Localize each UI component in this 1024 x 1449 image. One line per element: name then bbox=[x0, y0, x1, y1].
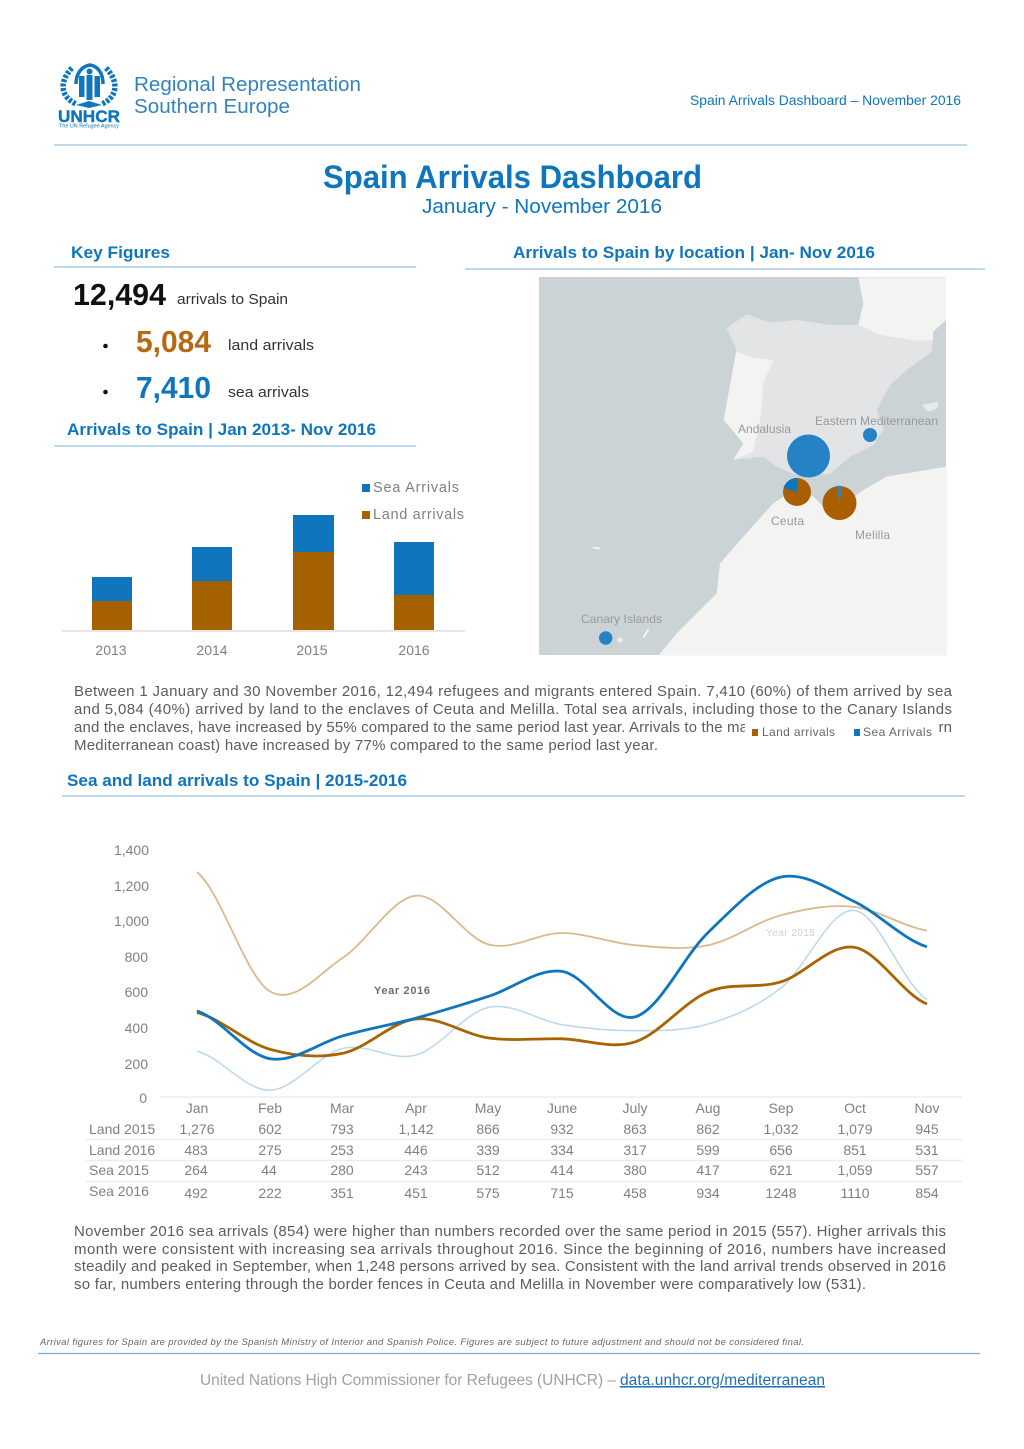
text block: summary: and 5,084 (40%) arrived by land to the enclaves of Ceuta and Melilla. Total sea arrivals, including those to the Canary Islands bbox=[74, 701, 952, 718]
table row: sea 2016: 854 bbox=[915, 1185, 939, 1201]
map marker: Andalusia: Andalusia bbox=[738, 422, 791, 436]
footer: data.unhcr.org/mediterranean bbox=[620, 1372, 825, 1389]
table row: land 2016: 531 bbox=[915, 1142, 939, 1158]
table row: land 2015: 863 bbox=[623, 1121, 647, 1137]
bar chart legend: Sea Arrivals bbox=[373, 480, 459, 496]
table row: land 2015: 1,142 bbox=[398, 1121, 434, 1137]
table row: sea 2015: 557 bbox=[915, 1162, 939, 1178]
bar chart: 2016 bbox=[398, 642, 430, 658]
table row: land 2015: 602 bbox=[258, 1121, 282, 1137]
table row: land 2016: 253 bbox=[330, 1142, 354, 1158]
table row: sea 2015: 280 bbox=[330, 1162, 354, 1178]
footnote: Arrival figures for Spain are provided by the Spanish Ministry of Interior and Spanish Police. Figures are subject to future adjustment and should not be considered final. bbox=[39, 1337, 804, 1348]
table row: land 2016: 483 bbox=[184, 1142, 208, 1158]
footer: United Nations High Commissioner for Refugees (UNHCR) – bbox=[200, 1372, 616, 1389]
table header: months: Apr bbox=[405, 1100, 427, 1116]
text block: summary: Mediterranean coast) have increased by 77% compared to the same period last year. bbox=[74, 737, 658, 754]
table header: months: Jan bbox=[186, 1100, 208, 1116]
bar chart bbox=[62, 515, 465, 658]
map marker: Eastern Mediterranean: Eastern Mediterranean bbox=[815, 414, 938, 428]
header: document label: Spain Arrivals Dashboard – November 2016 bbox=[690, 93, 961, 108]
y axis labels bbox=[114, 842, 149, 1106]
text block: november commentary: November 2016 sea arrivals (854) were higher than numbers recorded over the same period in 2015 (557). Higher arrivals this bbox=[74, 1223, 946, 1240]
line: land 2016 bbox=[197, 947, 927, 1056]
total arrivals bbox=[73, 277, 288, 312]
table header: months: Sep bbox=[769, 1100, 794, 1116]
panel: key figures bbox=[54, 243, 416, 405]
text block: november commentary: steadily and peaked in September, when 1,248 persons arrived by sea. Consistent with the land arrival trends observed in 2016 bbox=[74, 1258, 946, 1275]
table row: land 2016: 275 bbox=[258, 1142, 282, 1158]
header: office name bbox=[134, 74, 361, 118]
table row: land 2015: 1,079 bbox=[837, 1121, 873, 1137]
map marker: Eastern Mediterranean bbox=[815, 414, 938, 442]
table header: months: Nov bbox=[915, 1100, 939, 1116]
table row: sea 2015: 1,059 bbox=[837, 1162, 873, 1178]
line: sea 2015 bbox=[197, 910, 927, 1090]
icon: UNHCR logo bbox=[58, 65, 120, 130]
y axis labels: 1,000 bbox=[114, 913, 149, 929]
line: sea 2016 bbox=[197, 876, 927, 1059]
land arrivals: 5,084 bbox=[136, 324, 212, 359]
y axis labels: 600 bbox=[125, 984, 148, 1000]
bar chart legend bbox=[362, 480, 464, 523]
footer bbox=[200, 1372, 825, 1389]
map marker: Ceuta bbox=[771, 478, 811, 528]
table row: sea 2016: 934 bbox=[696, 1185, 720, 1201]
table row: land 2015 bbox=[89, 1121, 939, 1137]
icon: UNHCR logo: The UN Refugee Agency bbox=[59, 124, 120, 130]
table row: sea 2016: Sea 2016 bbox=[89, 1183, 149, 1199]
map legend: Land arrivals bbox=[762, 725, 835, 739]
table row: land 2016: Land 2016 bbox=[89, 1142, 155, 1158]
table row: land 2016: 599 bbox=[696, 1142, 720, 1158]
map marker: Melilla bbox=[822, 486, 890, 542]
table row: sea 2015: 417 bbox=[696, 1162, 720, 1178]
table row: sea 2015: 512 bbox=[476, 1162, 500, 1178]
table header: months: Feb bbox=[258, 1100, 282, 1116]
table header: months: Oct bbox=[844, 1100, 866, 1116]
table row: sea 2016: 575 bbox=[476, 1185, 500, 1201]
table row: sea 2015: 380 bbox=[623, 1162, 647, 1178]
heading: arrivals by year: Arrivals to Spain | Jan 2013- Nov 2016 bbox=[67, 420, 376, 439]
line chart: monthly arrivals bbox=[114, 842, 962, 1106]
text block: november commentary: month were consistent with increasing sea arrivals throughout 2016. Since the beginning of 2016, numbers have increased bbox=[74, 1241, 946, 1258]
table row: sea 2016: 1248 bbox=[765, 1185, 797, 1201]
bar chart: 2014 bbox=[196, 642, 228, 658]
land arrivals bbox=[103, 324, 314, 359]
total arrivals: 12,494 bbox=[73, 277, 167, 312]
table row: sea 2016: 451 bbox=[404, 1185, 428, 1201]
table row: sea 2015: 414 bbox=[550, 1162, 574, 1178]
table row: land 2015: Land 2015 bbox=[89, 1121, 155, 1137]
table header: months: Mar bbox=[330, 1100, 354, 1116]
table row: land 2015: 862 bbox=[696, 1121, 720, 1137]
table row: land 2016: 656 bbox=[769, 1142, 793, 1158]
y axis labels: 200 bbox=[125, 1056, 148, 1072]
table row: land 2016: 446 bbox=[404, 1142, 428, 1158]
sea arrivals: 7,410 bbox=[136, 370, 211, 405]
header: office name: Regional Representation bbox=[134, 74, 361, 96]
table row: sea 2016: 458 bbox=[623, 1185, 647, 1201]
text block: november commentary bbox=[74, 1223, 946, 1293]
heading: map: Arrivals to Spain by location | Jan- Nov 2016 bbox=[513, 243, 875, 262]
sea arrivals bbox=[103, 370, 309, 405]
bar chart: 2013 bbox=[95, 642, 127, 658]
table row: sea 2015: 243 bbox=[404, 1162, 428, 1178]
table header: months: June bbox=[547, 1100, 577, 1116]
label: year 2015: Year 2015 bbox=[766, 928, 815, 939]
y axis labels: 400 bbox=[125, 1020, 148, 1036]
y axis labels: 1,200 bbox=[114, 878, 149, 894]
map: arrivals by location bbox=[539, 277, 947, 656]
y axis labels: 1,400 bbox=[114, 842, 149, 858]
table row: land 2016: 334 bbox=[550, 1142, 574, 1158]
land arrivals: land arrivals bbox=[228, 338, 314, 354]
heading: monthly arrivals: Sea and land arrivals to Spain | 2015-2016 bbox=[67, 771, 407, 790]
y axis labels: 800 bbox=[125, 949, 148, 965]
bar chart: 2015 bbox=[296, 642, 328, 658]
table row: sea 2015: 621 bbox=[769, 1162, 793, 1178]
bar chart legend: Land arrivals bbox=[373, 507, 464, 523]
title: Spain Arrivals Dashboard bbox=[323, 159, 702, 195]
label: year 2016: Year 2016 bbox=[374, 985, 430, 997]
line: land 2015 bbox=[197, 872, 927, 995]
map legend bbox=[745, 721, 938, 740]
y axis labels: 0 bbox=[139, 1090, 147, 1106]
table row: sea 2015: 44 bbox=[261, 1162, 277, 1178]
heading: key figures: Key Figures bbox=[71, 243, 170, 262]
table header: months: Aug bbox=[696, 1100, 720, 1116]
map marker: Melilla: Melilla bbox=[855, 528, 890, 542]
text block: summary bbox=[74, 683, 953, 754]
map marker: Ceuta: Ceuta bbox=[771, 514, 804, 528]
table header: months: July bbox=[623, 1100, 647, 1116]
map legend: Sea Arrivals bbox=[863, 725, 932, 739]
map marker: Canary Islands: Canary Islands bbox=[581, 612, 662, 626]
table row: sea 2015: Sea 2015 bbox=[89, 1162, 149, 1178]
table row: land 2016: 317 bbox=[623, 1142, 647, 1158]
table row: land 2015: 1,276 bbox=[179, 1121, 215, 1137]
table row: sea 2015: 264 bbox=[184, 1162, 208, 1178]
table row: land 2016: 339 bbox=[476, 1142, 500, 1158]
map marker: Canary Islands bbox=[581, 612, 662, 645]
text block: summary: Between 1 January and 30 November 2016, 12,494 refugees and migrants entered Spain. 7,410 (60%) of them arrived by sea bbox=[74, 683, 953, 700]
table row: sea 2016 bbox=[89, 1183, 939, 1201]
table row: sea 2016: 492 bbox=[184, 1185, 208, 1201]
header: office name: Southern Europe bbox=[134, 96, 290, 118]
table row: land 2015: 1,032 bbox=[763, 1121, 799, 1137]
panel: arrivals by year bbox=[54, 420, 465, 658]
text block: november commentary: so far, numbers entering through the border fences in Ceuta and Melilla in November were comparatively low (531). bbox=[74, 1276, 866, 1293]
table row: land 2016 bbox=[89, 1142, 939, 1158]
table row: sea 2016: 351 bbox=[330, 1185, 354, 1201]
text block: summary: and the enclaves, have increased by 55% compared to the same period last year. Arrivals to the mainland (Andalusia and Eastern bbox=[74, 719, 952, 736]
data table bbox=[86, 1100, 962, 1201]
table row: land 2015: 793 bbox=[330, 1121, 354, 1137]
icon: UNHCR logo: UNHCR bbox=[58, 107, 120, 126]
table header: months: May bbox=[475, 1100, 501, 1116]
table row: sea 2016: 1110 bbox=[840, 1185, 870, 1201]
table row: land 2016: 851 bbox=[843, 1142, 867, 1158]
total arrivals: arrivals to Spain bbox=[177, 292, 288, 308]
sea arrivals: sea arrivals bbox=[228, 385, 309, 401]
table row: sea 2016: 715 bbox=[550, 1185, 574, 1201]
table row: land 2015: 866 bbox=[476, 1121, 500, 1137]
subtitle: January - November 2016 bbox=[422, 196, 662, 218]
table header: months bbox=[186, 1100, 939, 1116]
table row: land 2015: 945 bbox=[915, 1121, 939, 1137]
table row: sea 2015 bbox=[89, 1162, 939, 1178]
table row: land 2015: 932 bbox=[550, 1121, 574, 1137]
table row: sea 2016: 222 bbox=[258, 1185, 282, 1201]
map marker: Andalusia bbox=[738, 422, 830, 478]
